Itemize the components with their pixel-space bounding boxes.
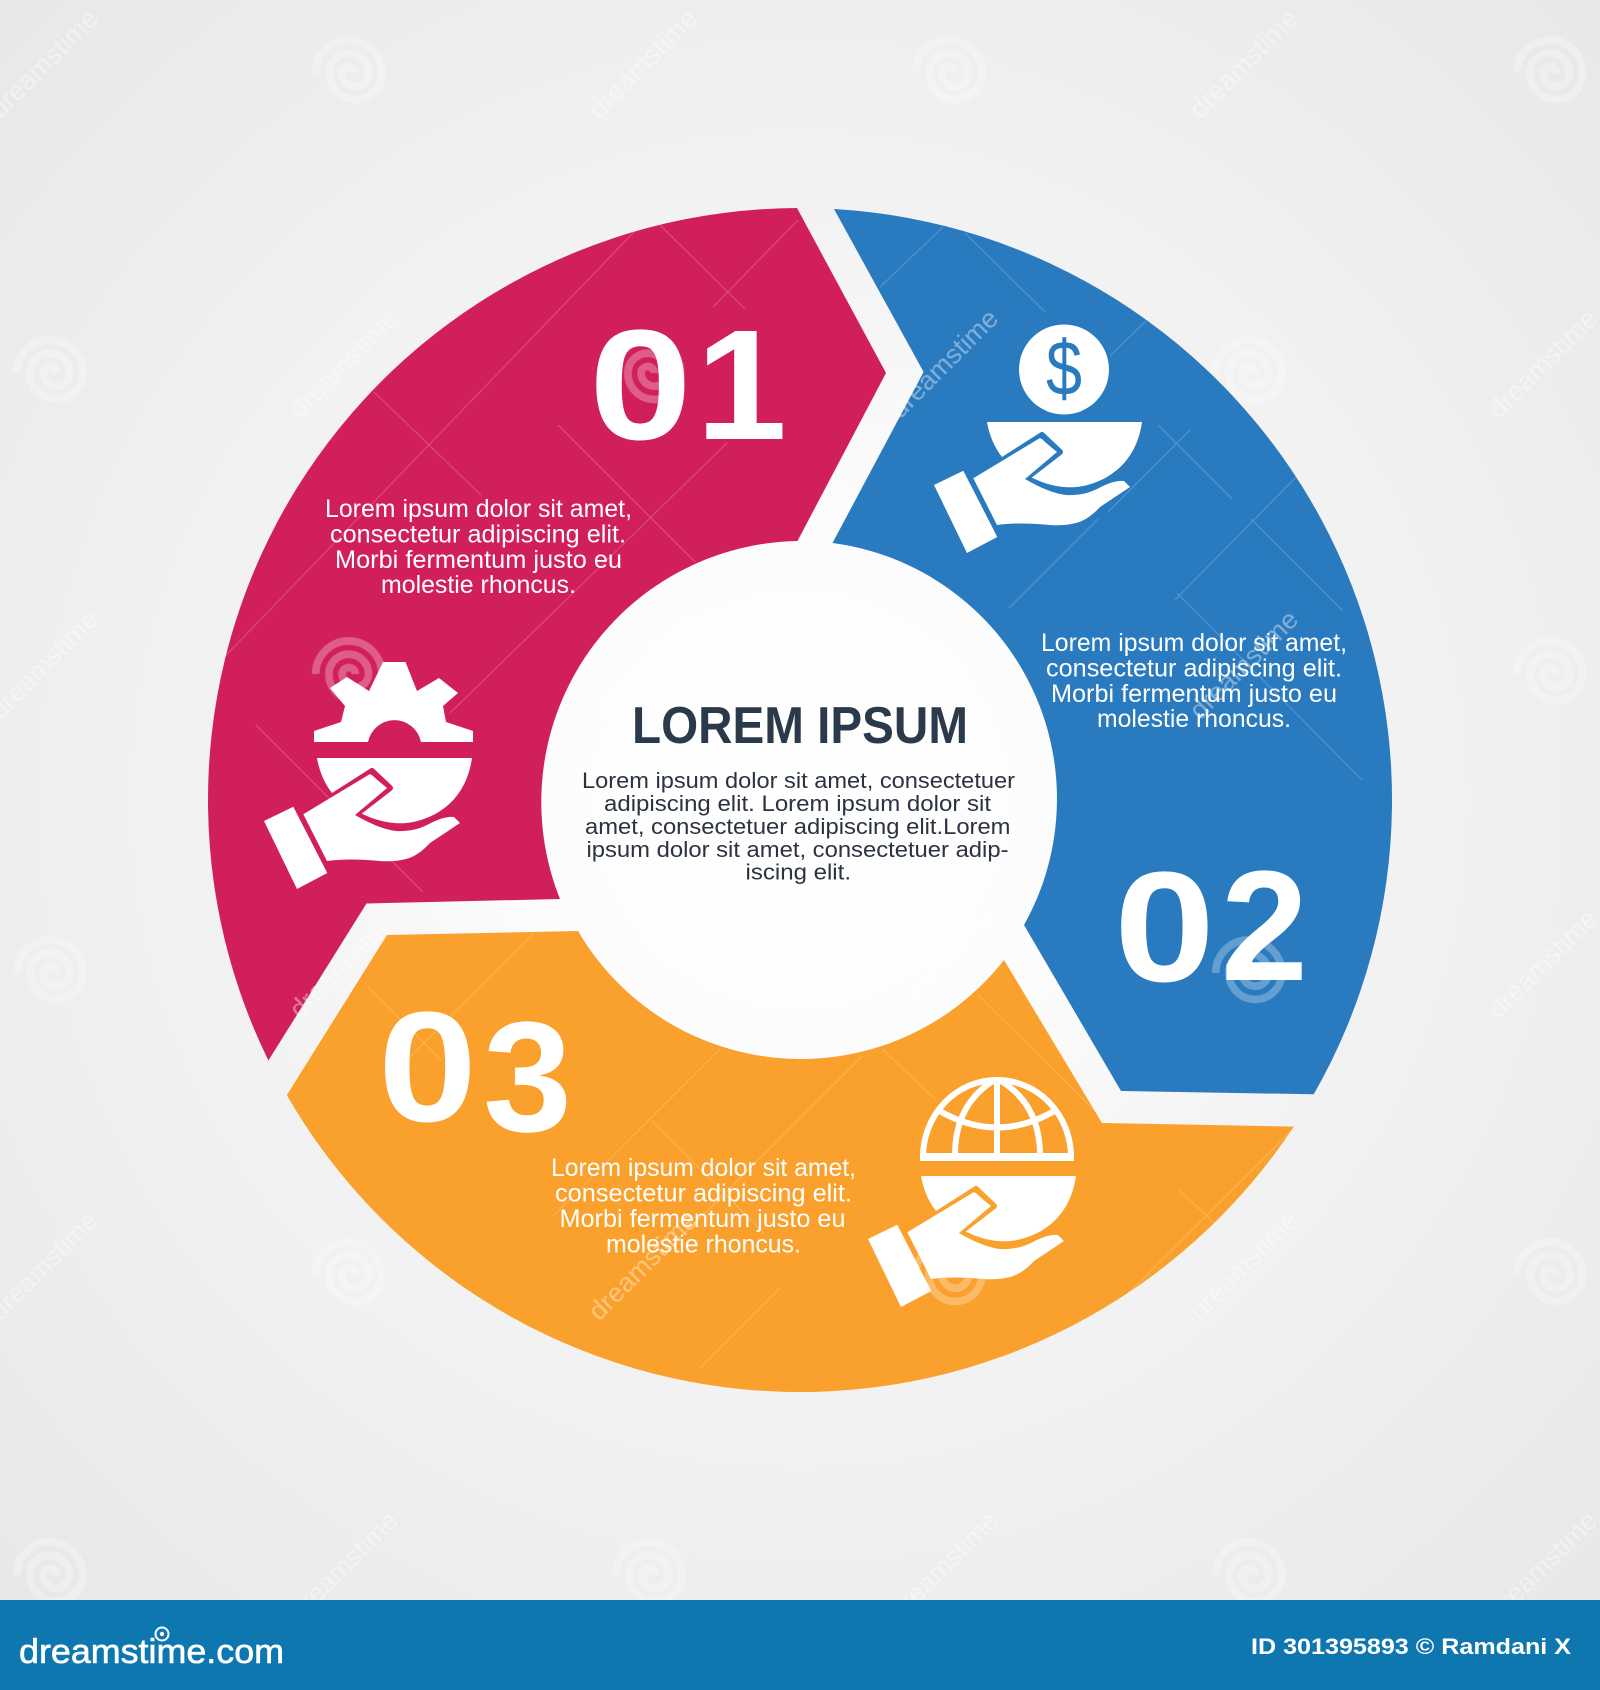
text block: segment 03: Lorem ipsum dolor sit amet, — [551, 1154, 856, 1182]
number 01 — [589, 298, 787, 473]
watermark text: dreamstime — [1183, 1205, 1304, 1326]
text block: segment 01: Lorem ipsum dolor sit amet, — [325, 495, 632, 523]
number 03 — [378, 980, 572, 1165]
panel: segment 02 blue arrow — [832, 209, 1392, 1094]
icon: hand holding dollar coin: $ — [1046, 324, 1082, 412]
heading: center title: LOREM IPSUM — [632, 697, 968, 755]
text block: center description: iscing elit. — [746, 860, 851, 884]
icon: hand holding globe — [868, 1080, 1076, 1307]
text block: segment 02 — [1041, 629, 1347, 733]
watermark text: dreamstime — [1482, 903, 1600, 1024]
watermark text: dreamstime — [283, 303, 404, 424]
number 03: 0 — [378, 980, 477, 1155]
text block: segment 02: molestie rhoncus. — [1097, 705, 1291, 733]
text block: center description: adipiscing elit. Lorem ipsum dolor sit — [604, 791, 991, 816]
number 03: 3 — [483, 990, 572, 1165]
text block: segment 03 — [551, 1154, 856, 1258]
number 01: 1 — [696, 298, 787, 473]
text block: center description: amet, consectetuer adipiscing elit.Lorem — [585, 814, 1010, 839]
text block: segment 02: consectetur adipiscing elit. — [1046, 654, 1342, 682]
watermark text: dreamstime — [283, 1505, 404, 1626]
text block: segment 03: Morbi fermentum justo eu — [560, 1205, 846, 1233]
number 02: 2 — [1221, 839, 1308, 1014]
footer bar — [0, 1600, 1600, 1690]
watermark text: dreamstime — [1482, 303, 1600, 424]
watermark text: dreamstime — [582, 3, 703, 124]
panel: segment 03 orange arrow — [287, 931, 1294, 1392]
watermark text: dreamstime — [1183, 3, 1304, 124]
number 02 — [1114, 839, 1308, 1015]
text block: segment 01: consectetur adipiscing elit. — [330, 520, 626, 548]
text block: segment 01 — [325, 495, 632, 599]
text block: center description — [582, 768, 1015, 884]
watermark text: dreamstime — [582, 1205, 703, 1326]
footer credit text: ID 301395893 © Ramdani X — [1251, 1634, 1571, 1659]
text block: segment 03: consectetur adipiscing elit. — [555, 1180, 852, 1208]
text block: center description: Lorem ipsum dolor sit amet, consectetuer — [582, 768, 1015, 793]
number 01: 0 — [589, 298, 692, 473]
text block: center description: ipsum dolor sit amet, consectetuer adip- — [586, 837, 1008, 862]
watermark text: dreamstime — [883, 1505, 1004, 1626]
watermark text: dreamstime — [283, 903, 404, 1024]
panel: segment 01 magenta arrow — [208, 208, 886, 1060]
footer logo: dreamstime.com: dreamstime.com — [19, 1633, 284, 1671]
text block: segment 01: Morbi fermentum justo eu — [335, 546, 622, 574]
text block: segment 01: molestie rhoncus. — [381, 571, 576, 599]
number 02: 0 — [1114, 840, 1215, 1015]
watermark text: dreamstime — [1482, 1505, 1600, 1626]
text block: segment 02: Lorem ipsum dolor sit amet, — [1041, 629, 1347, 657]
watermark text: dreamstime — [883, 903, 1004, 1024]
icon: hand holding gear — [264, 662, 473, 889]
watermark text: dreamstime — [582, 604, 703, 725]
icon: hand holding dollar coin — [934, 324, 1142, 553]
watermark text: dreamstime — [883, 303, 1004, 424]
text block: segment 03: molestie rhoncus. — [606, 1230, 801, 1258]
watermark text: dreamstime — [1183, 604, 1304, 725]
text block: segment 02: Morbi fermentum justo eu — [1051, 680, 1337, 708]
